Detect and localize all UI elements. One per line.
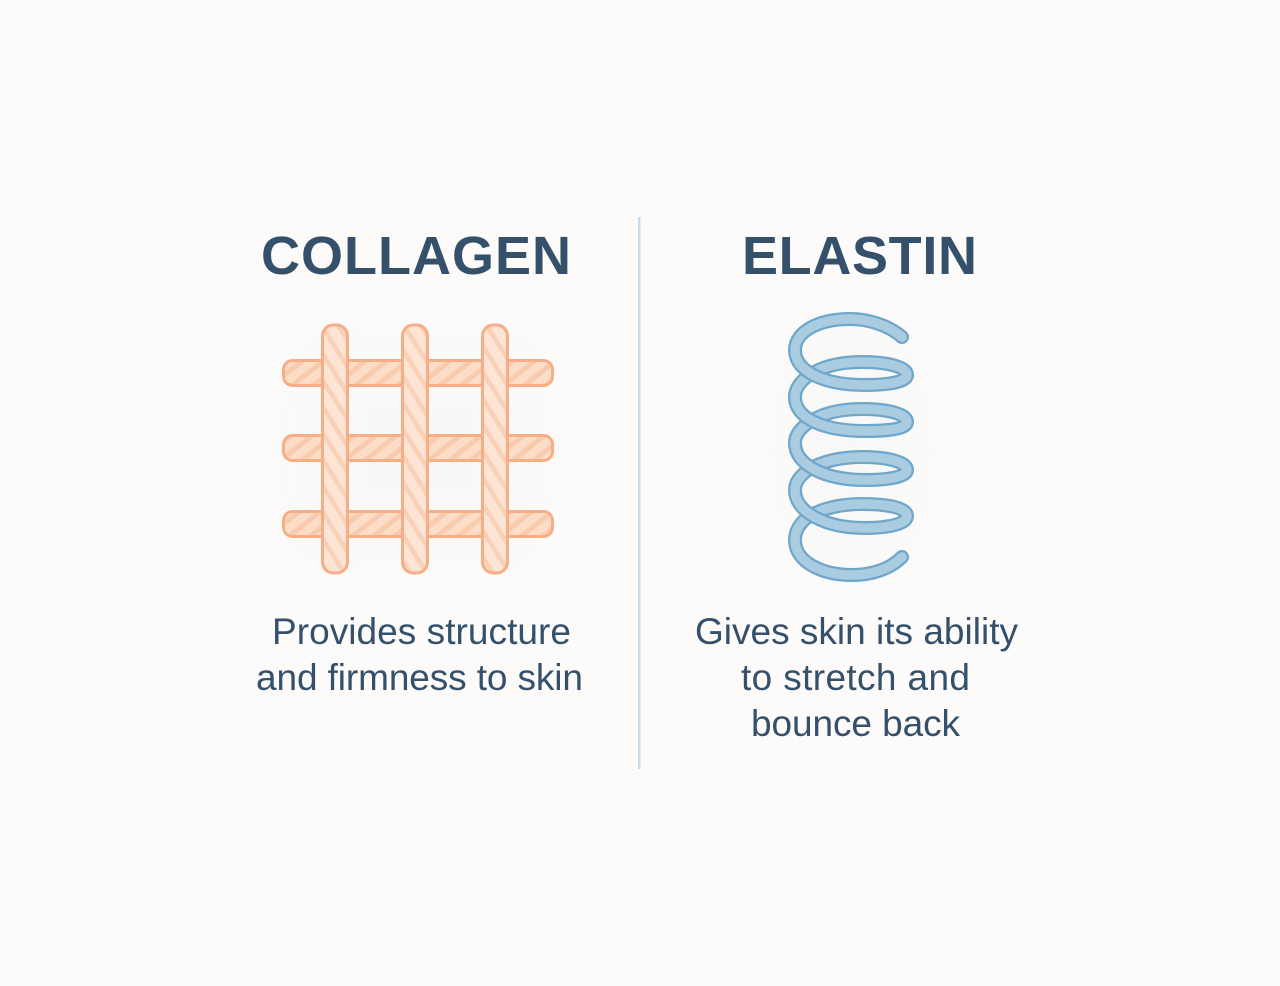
description: collagen: Provides structure bbox=[272, 611, 571, 652]
description: elastin bbox=[695, 611, 1018, 744]
heading: elastin: ELASTIN bbox=[742, 226, 977, 286]
description: elastin: Gives skin its ability bbox=[695, 611, 1018, 652]
panel: collagen bbox=[256, 226, 583, 698]
divider between panels bbox=[638, 217, 640, 769]
icon: collagen woven mesh bbox=[284, 325, 552, 573]
description: collagen: and firmness to skin bbox=[256, 657, 583, 698]
description: elastin: bounce back bbox=[751, 703, 960, 744]
panel: elastin bbox=[695, 226, 1018, 744]
icon: elastin spring coil bbox=[795, 319, 909, 575]
description: collagen bbox=[256, 611, 583, 698]
description: elastin: to stretch and bbox=[741, 657, 970, 698]
heading: collagen: COLLAGEN bbox=[261, 226, 571, 286]
